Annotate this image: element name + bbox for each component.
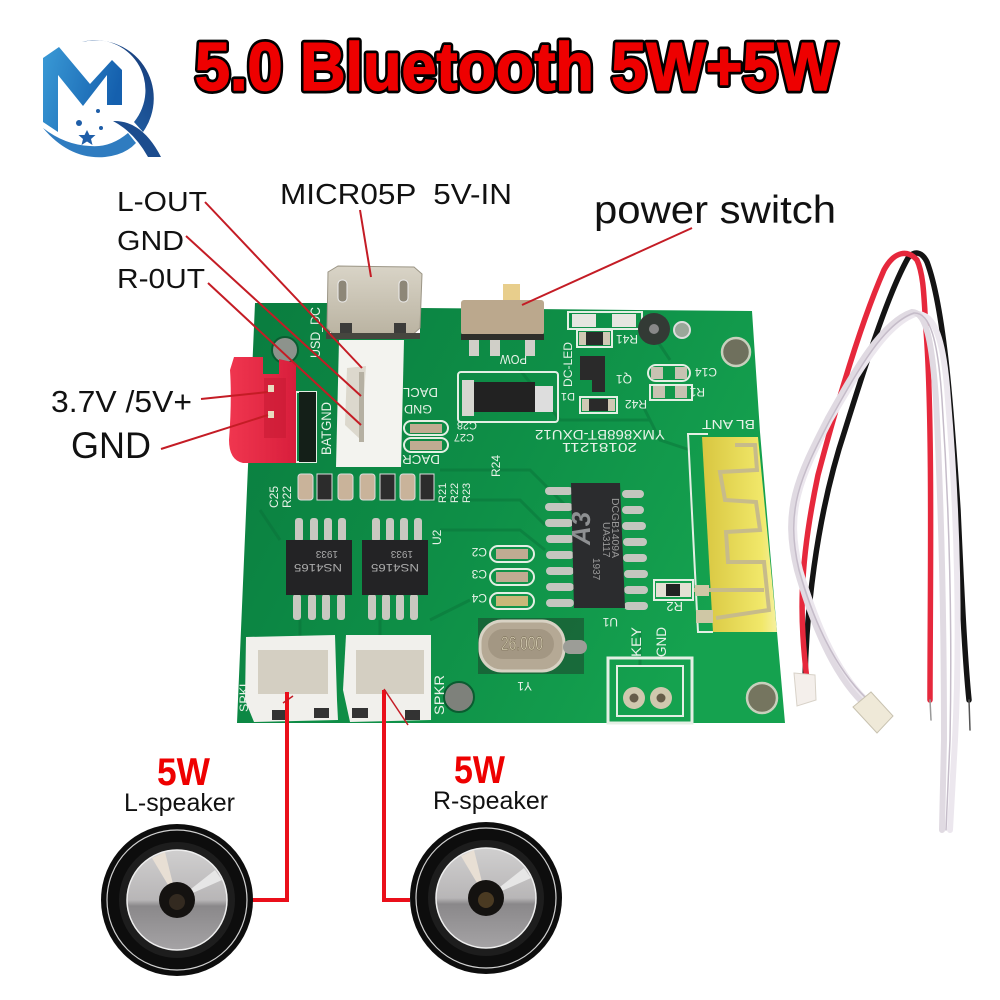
chip: main bluetooth IC — [545, 483, 648, 610]
silkscreen labels: BATGND — [318, 402, 334, 455]
label: GND: GND — [117, 225, 184, 256]
label: 3.7V /5V+: 3.7V /5V+ — [51, 384, 192, 419]
label: power switch: power switch — [594, 189, 836, 232]
silkscreen labels: C3 — [471, 567, 487, 581]
label: GND battery: GND — [71, 425, 151, 466]
logo: MQ brand mark — [43, 40, 161, 157]
chip: main bluetooth IC: A3 — [566, 511, 596, 546]
silkscreen labels: POW — [499, 352, 527, 367]
crystal 26.000: 26.000 — [501, 634, 543, 655]
silkscreen labels: C28 — [457, 419, 477, 431]
label: MICR05P 5V-IN: MICR05P 5V-IN — [280, 179, 512, 211]
silkscreen outlines — [296, 312, 713, 723]
connector: right speaker socket — [343, 635, 431, 722]
callout arrows: red leader lines — [161, 202, 692, 449]
silkscreen labels: R24 — [489, 455, 503, 477]
silkscreen labels: C27 — [454, 431, 474, 443]
silkscreen labels: GND — [404, 402, 432, 416]
panel: circuit board — [237, 303, 785, 723]
silkscreen labels: SPKL — [237, 680, 251, 712]
connector: micro USB port — [326, 266, 422, 339]
mounting holes — [272, 337, 777, 713]
crystal 26.000 — [478, 618, 587, 674]
silkscreen labels: C14 — [695, 365, 717, 379]
silkscreen labels: R21 — [437, 483, 449, 503]
label: L-OUT: L-OUT — [117, 186, 207, 217]
connector: power slide switch — [461, 284, 544, 356]
board traces — [260, 330, 690, 665]
silkscreen labels: C2 — [471, 545, 487, 559]
silkscreen labels: DC-LED — [561, 342, 575, 387]
silkscreen labels: BL ANT — [702, 417, 755, 432]
white ribbon — [794, 314, 958, 830]
silkscreen labels: KEY — [628, 626, 644, 657]
chip: main bluetooth IC: DCGB1409A — [609, 498, 620, 558]
silkscreen labels: DACR — [402, 452, 440, 467]
chip: main bluetooth IC: UA3117 — [600, 522, 611, 558]
silkscreen labels: U2 — [430, 529, 444, 545]
silkscreen labels: GND — [653, 627, 669, 657]
silkscreen labels: D1 — [561, 390, 575, 402]
SMD components row — [298, 313, 691, 606]
connector: red battery socket — [229, 357, 316, 463]
wire harness — [791, 253, 970, 830]
silkscreen labels: DACL — [403, 385, 438, 400]
silkscreen labels: U1 — [602, 615, 618, 629]
chip: main bluetooth IC: 1937 — [590, 558, 601, 581]
chip: left amplifier NS4165: 1933 — [315, 548, 338, 559]
silkscreen labels: YMX868BT-DXU12 — [535, 427, 665, 443]
label: 5W left: 5W — [157, 751, 210, 794]
title: 5.0 Bluetooth 5W+5W — [195, 29, 838, 105]
connector: white DAC output socket — [336, 340, 404, 467]
silkscreen labels: C4 — [471, 591, 487, 605]
connector: left speaker socket — [245, 635, 338, 722]
speaker wire: right — [283, 689, 410, 900]
silkscreen labels: 20181211 — [562, 440, 637, 455]
bluetooth PCB antenna — [694, 437, 777, 632]
icon: left speaker — [101, 824, 253, 976]
chip: right amplifier NS4165 — [362, 518, 428, 620]
silkscreen labels: USD_DC — [307, 307, 323, 358]
speaker wire: left — [250, 692, 287, 900]
small wire connectors — [794, 673, 893, 733]
silkscreen labels: R22 — [449, 483, 461, 503]
red wire — [802, 253, 931, 700]
icon: right speaker — [410, 822, 562, 974]
silkscreen labels: R22 — [280, 486, 294, 508]
title: 5.0 Bluetooth 5W+5W — [195, 29, 838, 105]
silkscreen labels: R1 — [689, 385, 705, 399]
chip: right amplifier NS4165: 1933 — [390, 548, 413, 559]
silkscreen labels: R42 — [625, 397, 647, 411]
label: 5W right: 5W — [454, 749, 505, 792]
key and ground pads — [623, 687, 672, 709]
silkscreen labels: Q1 — [616, 372, 632, 386]
silkscreen labels: SPKR — [431, 675, 447, 715]
silkscreen labels: R41 — [616, 332, 638, 346]
label: R-speaker: R-speaker — [433, 787, 548, 815]
silkscreen labels: R2 — [666, 599, 683, 614]
silkscreen labels: C25 — [267, 486, 281, 508]
silkscreen labels: Y1 — [517, 679, 532, 693]
chip: left amplifier NS4165 — [286, 518, 352, 620]
chip: right amplifier NS4165: NS4165 — [371, 561, 419, 573]
label: R-0UT: R-0UT — [117, 263, 205, 294]
silkscreen labels: R23 — [461, 483, 473, 503]
black wire — [805, 253, 969, 700]
tinned wire tips — [930, 700, 931, 720]
chip: left amplifier NS4165: NS4165 — [294, 561, 342, 573]
label: L-speaker: L-speaker — [124, 789, 235, 817]
silkscreen labels — [237, 307, 755, 715]
